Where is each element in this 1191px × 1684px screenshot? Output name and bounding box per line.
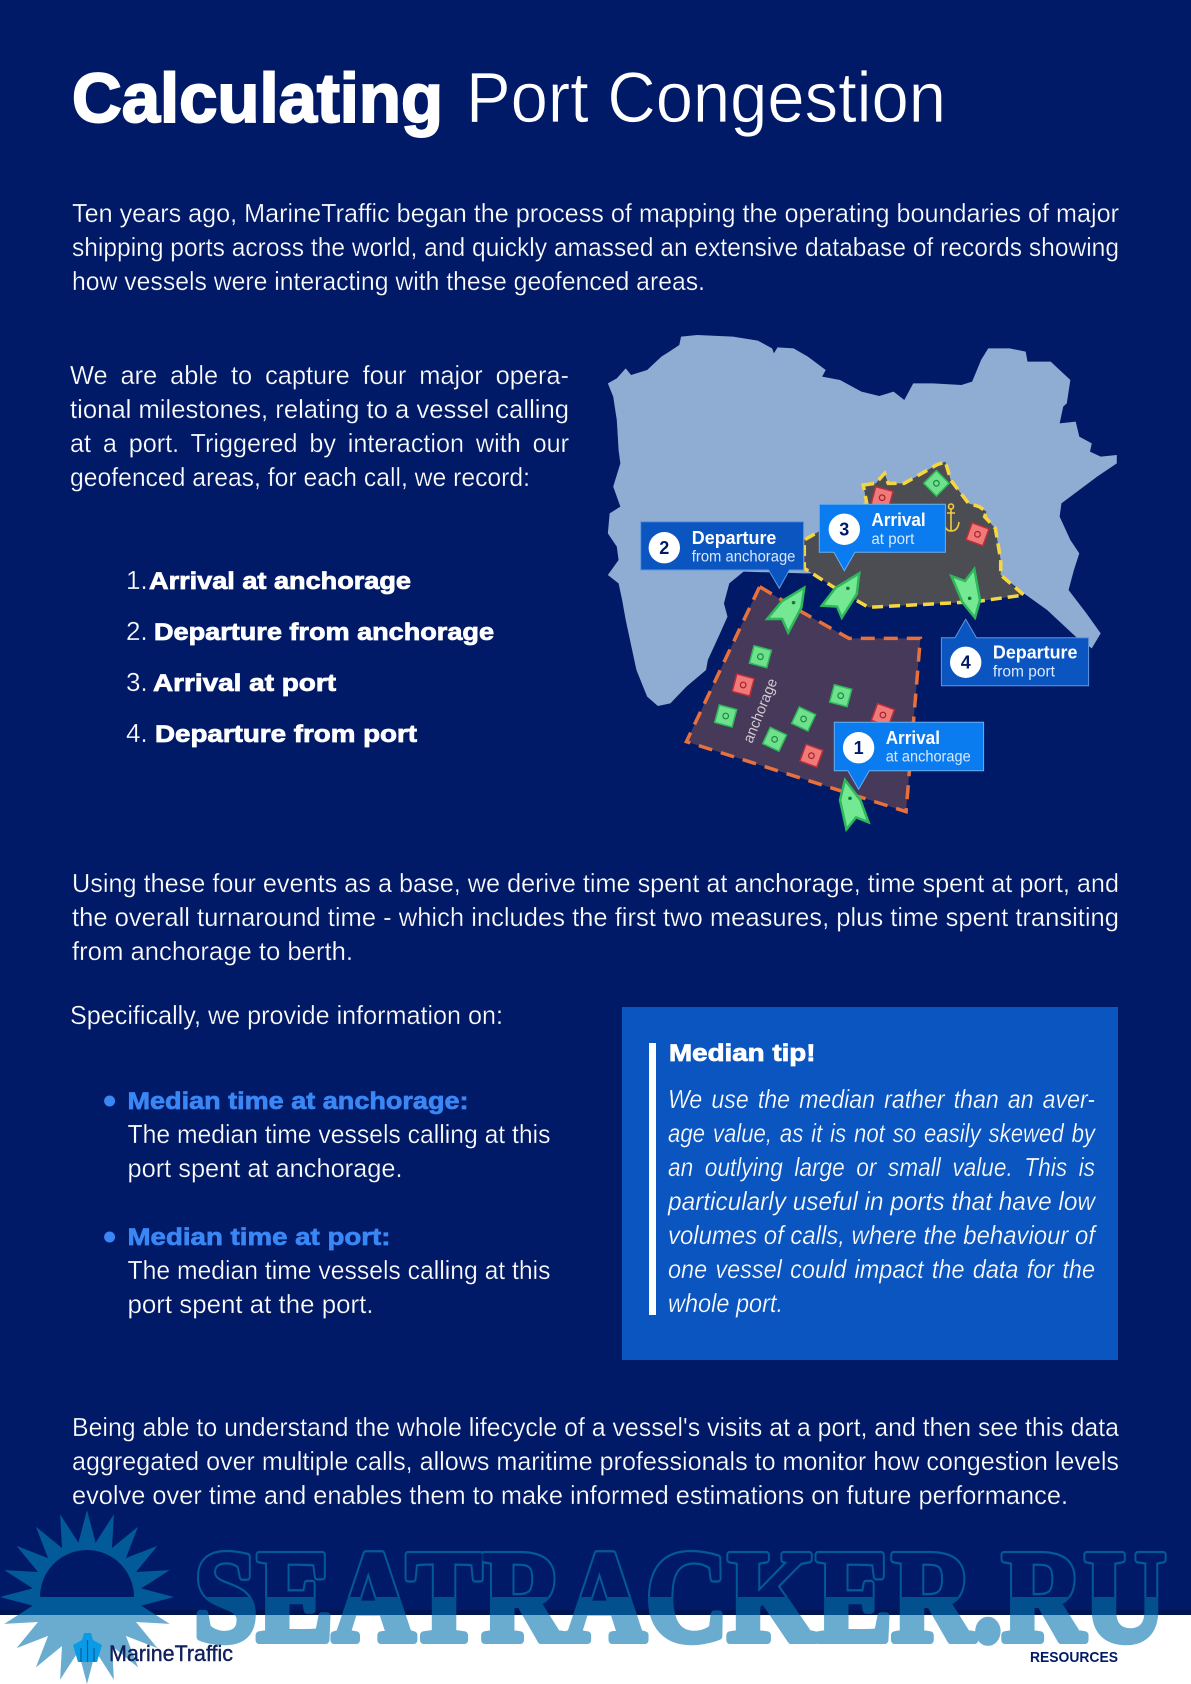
panel: median tip: one vessel could impact the data for the bbox=[668, 1254, 1095, 1284]
port area bbox=[804, 462, 1024, 607]
numbered milestone list: 3. bbox=[126, 667, 148, 697]
callout 4: departure from port: Departure bbox=[993, 642, 1078, 662]
callout 3: arrival at port: Arrival bbox=[871, 510, 926, 530]
watermark sun emblem bbox=[0, 1510, 174, 1684]
numbered milestone list: 4. bbox=[126, 718, 148, 748]
milestones paragraph bbox=[70, 360, 569, 492]
derived measures paragraph: from anchorage to berth. bbox=[72, 936, 353, 966]
callout 2: departure from anchorage: Departure bbox=[692, 528, 776, 548]
anchorage area bbox=[686, 587, 920, 812]
bullet: median time at anchorage: The median time vessels calling at this bbox=[128, 1119, 550, 1149]
intro paragraph: shipping ports across the world, and quickly amassed an extensive database of records showing bbox=[72, 232, 1119, 262]
numbered milestone list: 2. bbox=[126, 616, 148, 646]
panel: median tip: particularly useful in ports that have low bbox=[667, 1186, 1097, 1216]
logo: MarineTraffic bbox=[73, 1633, 233, 1666]
title bbox=[72, 59, 946, 138]
closing paragraph: Being able to understand the whole lifecycle of a vessel's visits at a port, and then see this data bbox=[72, 1412, 1120, 1442]
bullet: median time at anchorage: port spent at anchorage. bbox=[128, 1153, 402, 1183]
numbered milestone list: Arrival at port bbox=[153, 670, 336, 697]
moving ship arrows bbox=[767, 569, 980, 829]
icon: anchor bbox=[944, 504, 959, 531]
panel: median tip: whole port. bbox=[668, 1288, 783, 1318]
numbered milestone list: 1. bbox=[126, 565, 148, 595]
callout 4: departure from port bbox=[941, 619, 1089, 686]
milestones paragraph: tional milestones, relating to a vessel calling bbox=[70, 394, 569, 424]
vessels at berth and anchor bbox=[715, 471, 989, 767]
derived measures paragraph: the overall turnaround time - which includes the first two measures, plus time spent transiting bbox=[72, 902, 1119, 932]
callout 2: departure from anchorage: from anchorage bbox=[692, 549, 795, 566]
bullet: median time at port: Median time at port: bbox=[128, 1224, 390, 1251]
title: Port Congestion bbox=[466, 59, 946, 138]
callout 2: departure from anchorage bbox=[641, 522, 804, 588]
footer label: resources: RESOURCES bbox=[1030, 1649, 1118, 1666]
numbered milestone list: Arrival at anchorage bbox=[149, 568, 411, 595]
closing paragraph bbox=[72, 1412, 1120, 1510]
title: Calculating bbox=[72, 59, 443, 137]
panel: median tip: Median tip! bbox=[669, 1040, 816, 1067]
milestones paragraph: We are able to capture four major opera- bbox=[70, 360, 569, 390]
derived measures paragraph: Using these four events as a base, we derive time spent at anchorage, time spent at port, and bbox=[72, 868, 1119, 898]
numbered milestone list: Departure from anchorage bbox=[154, 619, 494, 646]
watermark wordmark bbox=[196, 1550, 1167, 1646]
panel: median tip: age value, as it is not so easily skewed by bbox=[668, 1118, 1097, 1148]
footer band bbox=[0, 1610, 1191, 1684]
bullet: median time at port bbox=[104, 1224, 550, 1319]
callout 1: arrival at anchorage bbox=[834, 722, 984, 789]
panel: median tip: volumes of calls, where the behaviour of bbox=[668, 1220, 1098, 1250]
bullet: median time at port: The median time vessels calling at this bbox=[128, 1255, 550, 1285]
specifics lead-in: Specifically, we provide information on: bbox=[70, 1000, 503, 1030]
milestones paragraph: at a port. Triggered by interaction with our bbox=[70, 428, 569, 458]
bullet: median time at anchorage: Median time at anchorage: bbox=[128, 1088, 468, 1115]
numbered milestone list bbox=[126, 565, 494, 748]
callout 1: arrival at anchorage: Arrival bbox=[886, 728, 940, 748]
callout 3: arrival at port: 3 bbox=[839, 520, 849, 540]
port map diagram bbox=[608, 335, 1117, 829]
derived measures paragraph bbox=[72, 868, 1119, 966]
callout 4: departure from port: 4 bbox=[961, 653, 971, 673]
intro paragraph: how vessels were interacting with these geofenced areas. bbox=[72, 266, 705, 296]
intro paragraph bbox=[72, 198, 1119, 296]
callout 3: arrival at port: at port bbox=[871, 531, 915, 548]
milestones paragraph: geofenced areas, for each call, we record: bbox=[70, 462, 530, 492]
land mass bbox=[608, 335, 1117, 706]
bullet: median time at port: port spent at the port. bbox=[128, 1289, 374, 1319]
panel: median tip: We use the median rather than an aver- bbox=[668, 1084, 1095, 1114]
anchorage label: anchorage bbox=[740, 676, 781, 745]
callout 1: arrival at anchorage: 1 bbox=[854, 738, 864, 758]
closing paragraph: aggregated over multiple calls, allows maritime professionals to monitor how congestion levels bbox=[72, 1446, 1119, 1476]
logo: MarineTraffic: MarineTraffic bbox=[109, 1641, 233, 1666]
callout 1: arrival at anchorage: at anchorage bbox=[886, 749, 971, 766]
intro paragraph: Ten years ago, MarineTraffic began the process of mapping the operating boundaries of major bbox=[72, 198, 1119, 228]
callout 4: departure from port: from port bbox=[993, 664, 1056, 681]
callout 2: departure from anchorage: 2 bbox=[659, 538, 669, 558]
panel: median tip: an outlying large or small value. This is bbox=[668, 1152, 1095, 1182]
panel: median tip bbox=[622, 1007, 1118, 1360]
bullet: median time at anchorage bbox=[104, 1088, 550, 1183]
numbered milestone list: Departure from port bbox=[155, 721, 417, 748]
closing paragraph: evolve over time and enables them to make informed estimations on future performance. bbox=[72, 1480, 1068, 1510]
callout 3: arrival at port bbox=[819, 504, 945, 571]
